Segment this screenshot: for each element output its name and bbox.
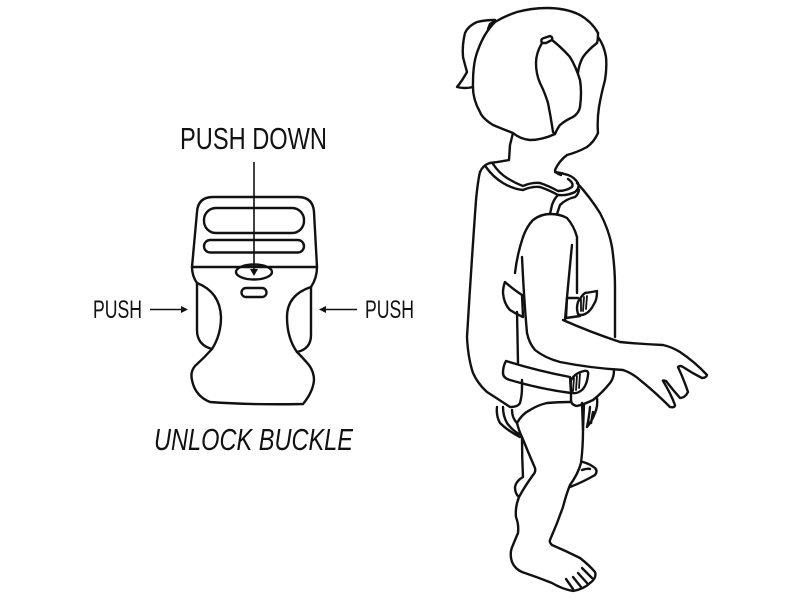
armhole [515,237,523,387]
hair [555,33,606,175]
upper clip detail [581,296,587,311]
vest back [467,163,522,407]
left grip [197,283,221,349]
head [473,8,598,140]
near leg and foot [511,403,595,591]
front upper strap [566,298,580,318]
right grip [287,287,311,352]
waist straps at front [583,398,597,430]
upper strap slot [204,208,304,233]
buckle top plate [192,197,317,267]
inner arm crease [565,245,572,320]
underwear [497,402,570,437]
hair bun tie [541,36,552,43]
arm and hand [522,257,707,407]
icon: buckle [191,197,317,404]
release button [236,264,272,280]
back upper strap [503,282,523,317]
arrow: push right [319,306,357,313]
arrow: push left [150,306,188,313]
neck [490,133,513,163]
vest front [571,183,615,406]
lower strap slot [204,240,304,252]
buckle lower body [191,267,317,404]
label: push left: PUSH [93,296,142,324]
arrow: push down [250,162,258,276]
toes [566,568,592,589]
hair tie [488,21,495,29]
ponytail [457,20,495,88]
back leg edge [515,438,523,497]
lower strap [503,361,571,393]
caption: unlock buckle: UNLOCK BUCKLE [154,422,353,457]
collar [486,164,579,195]
label: push right: PUSH [365,296,414,324]
heading: push down: PUSH DOWN [180,121,327,156]
small pill opening [242,288,266,297]
shoulder strap [550,190,579,214]
shoulder [523,214,577,293]
upper buckle clip [577,291,597,315]
ear-side hair lock [536,40,581,134]
lower clip detail [573,374,580,391]
far foot [570,462,596,487]
lower buckle clip [571,371,588,393]
illustration: child wearing vest [457,8,707,591]
